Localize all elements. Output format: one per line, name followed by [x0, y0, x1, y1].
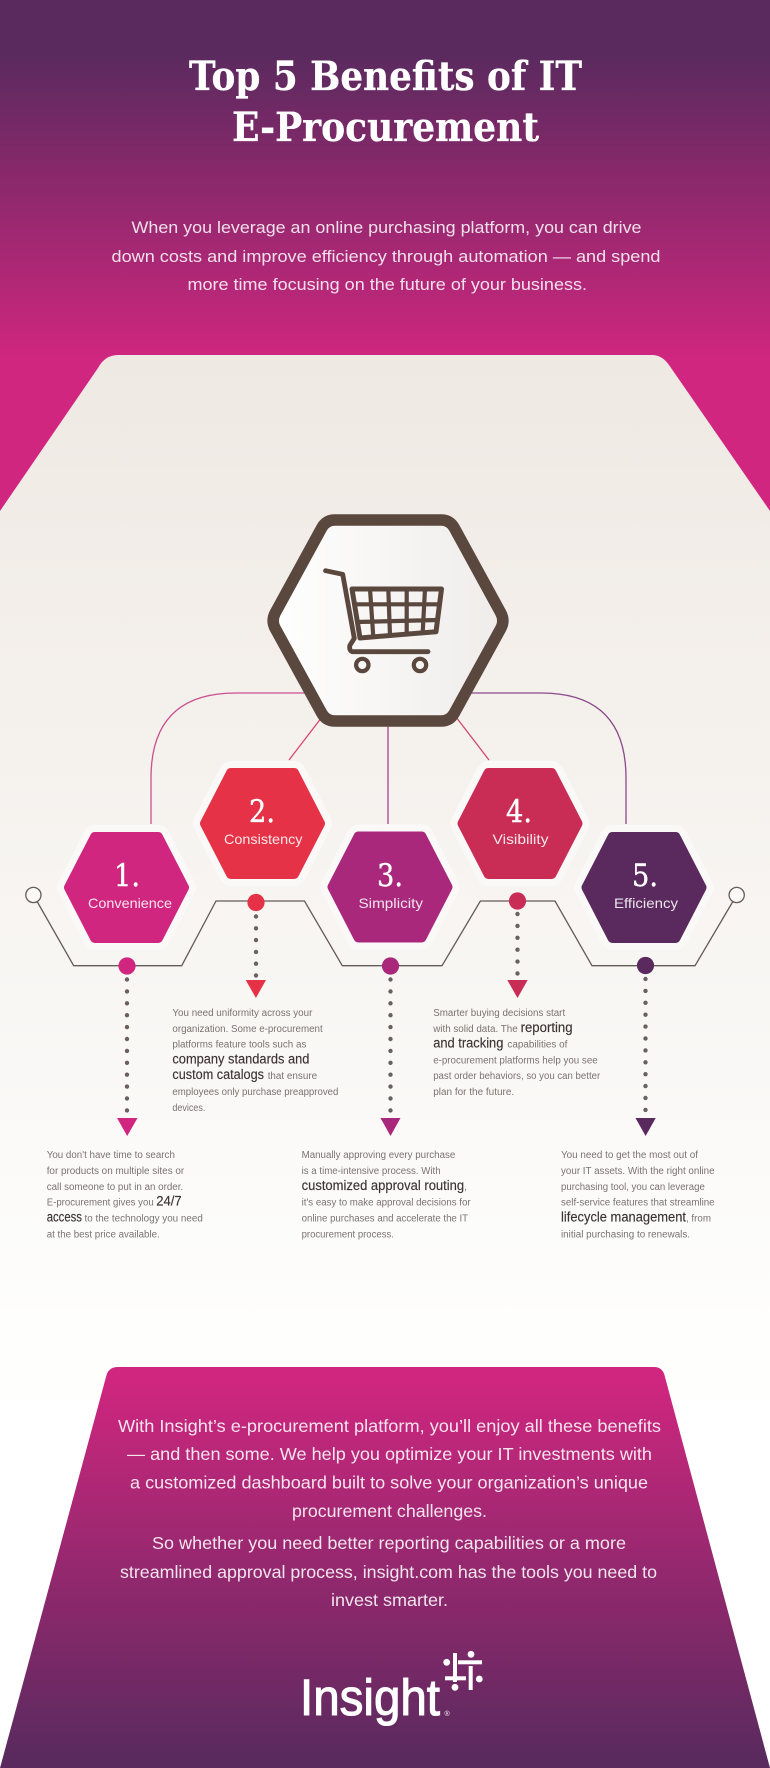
- connector to benefit 1: [151, 693, 309, 824]
- text block: visibility: capabilities of: [507, 1040, 568, 1051]
- arrow: benefit 2: [246, 894, 266, 998]
- text block: visibility: e-procurement platforms help you see: [433, 1056, 598, 1066]
- text block: consistency: custom catalogs: [172, 1067, 264, 1082]
- text block: simplicity: ,: [464, 1182, 467, 1193]
- text block: convenience: to the technology you need: [84, 1214, 203, 1225]
- text block: efficiency: [561, 1150, 715, 1240]
- text block: simplicity: procurement process.: [302, 1230, 394, 1240]
- text block: visibility: and tracking: [433, 1036, 503, 1051]
- benefit 1: hexagon: 1.: [114, 858, 140, 894]
- closing text: So whether you need better reporting capabilities or a more: [152, 1533, 626, 1553]
- text block: consistency: You need uniformity across your: [172, 1008, 313, 1019]
- benefit 4: hexagon: Visibility: [492, 831, 548, 847]
- text block: visibility: reporting: [521, 1020, 573, 1035]
- closing text: procurement challenges.: [292, 1501, 487, 1521]
- connector to benefit 3: [387, 726, 389, 824]
- closing text: a customized dashboard built to solve your organization’s unique: [130, 1472, 648, 1492]
- text block: efficiency: You need to get the most out of: [561, 1150, 698, 1161]
- text block: efficiency: self-service features that streamline: [561, 1198, 715, 1209]
- text block: visibility: Smarter buying decisions start: [433, 1008, 565, 1019]
- text block: consistency: [172, 1008, 338, 1114]
- text block: efficiency: initial purchasing to renewals.: [561, 1230, 690, 1240]
- text block: visibility: with solid data. The: [432, 1024, 518, 1035]
- text block: simplicity: it's easy to make approval decisions for: [302, 1198, 471, 1209]
- arrow: benefit 4: [507, 892, 528, 998]
- benefit 4: hexagon: [462, 773, 578, 874]
- benefit 3: hexagon: Simplicity: [358, 895, 423, 911]
- benefit 2: hexagon: Consistency: [224, 831, 302, 847]
- connector to benefit 5: [467, 693, 626, 824]
- benefit 1: hexagon: [69, 837, 184, 938]
- header background: [0, 0, 770, 520]
- intro text: down costs and improve efficiency through automation — and spend: [112, 248, 660, 266]
- text block: convenience: [47, 1150, 203, 1240]
- closing text: streamlined approval process, insight.com has the tools you need to: [120, 1562, 657, 1582]
- arrow: benefit 3: [380, 957, 400, 1136]
- text block: simplicity: [302, 1150, 471, 1240]
- timeline start node: [26, 887, 41, 903]
- arrow: benefit 5: [636, 957, 656, 1136]
- text block: simplicity: customized approval routing: [302, 1178, 464, 1193]
- panel: closing section: [0, 1367, 770, 1768]
- text block: convenience: access: [47, 1210, 82, 1225]
- logo: Insight: Insight: [300, 1669, 440, 1726]
- text block: simplicity: Manually approving every purchase: [302, 1150, 456, 1161]
- zigzag timeline: [33, 895, 737, 966]
- text block: convenience: for products on multiple sites or: [47, 1166, 185, 1177]
- connector to benefit 2: [289, 717, 322, 760]
- timeline end node: [729, 887, 744, 903]
- icon: Insight symbol: [443, 1651, 483, 1691]
- text block: efficiency: lifecycle management: [561, 1210, 686, 1225]
- intro text: [112, 219, 660, 294]
- benefit 5: hexagon: Efficiency: [614, 895, 678, 911]
- text block: consistency: employees only purchase preapproved: [172, 1087, 338, 1098]
- text block: convenience: call someone to put in an order.: [47, 1182, 183, 1193]
- benefit 3: hexagon: [332, 836, 448, 938]
- benefit 5: hexagon: [586, 837, 702, 938]
- text block: visibility: [432, 1008, 601, 1098]
- text block: convenience: 24/7: [156, 1194, 182, 1209]
- intro text: more time focusing on the future of your business.: [188, 276, 587, 294]
- closing text: [118, 1416, 661, 1610]
- text block: convenience: at the best price available.: [47, 1230, 160, 1240]
- panel: main benefits background: [0, 355, 770, 1400]
- title: Top 5 Benefits of IT: [189, 53, 582, 100]
- icon: shopping cart: [326, 571, 442, 671]
- benefit 2: hexagon: [205, 773, 320, 874]
- text block: consistency: platforms feature tools such as: [172, 1040, 306, 1051]
- central hexagon with cart: [273, 520, 503, 721]
- title: E-Procurement: [232, 104, 539, 151]
- benefit 1: hexagon: Convenience: [88, 895, 172, 911]
- title: [189, 53, 582, 151]
- text block: convenience: You don't have time to search: [47, 1150, 175, 1161]
- text block: efficiency: , from: [686, 1214, 711, 1225]
- text block: efficiency: your IT assets. With the right online: [561, 1166, 715, 1177]
- text block: consistency: devices.: [172, 1103, 205, 1114]
- logo: Insight: ®: [444, 1710, 450, 1718]
- benefit 4: hexagon: 4.: [506, 794, 532, 830]
- logo: Insight: [300, 1651, 483, 1726]
- text block: consistency: company standards and: [172, 1052, 309, 1066]
- arrow: benefit 1: [117, 957, 138, 1136]
- text block: simplicity: is a time-intensive process. With: [302, 1166, 441, 1177]
- text block: simplicity: online purchases and accelerate the IT: [302, 1214, 468, 1225]
- intro text: When you leverage an online purchasing platform, you can drive: [132, 219, 642, 237]
- benefit 2: hexagon: 2.: [249, 794, 275, 830]
- closing text: — and then some. We help you optimize your IT investments with: [127, 1444, 652, 1464]
- text block: visibility: plan for the future.: [433, 1087, 514, 1098]
- connector lines from cart to benefits: [151, 693, 626, 824]
- text block: efficiency: purchasing tool, you can leverage: [561, 1182, 705, 1193]
- benefit 3: hexagon: 3.: [377, 858, 403, 894]
- closing text: invest smarter.: [331, 1590, 448, 1610]
- closing text: With Insight’s e-procurement platform, you’ll enjoy all these benefits: [118, 1416, 661, 1436]
- connector to benefit 4: [456, 717, 489, 760]
- text block: consistency: that ensure: [268, 1071, 318, 1082]
- text block: convenience: E-procurement gives you: [47, 1198, 154, 1209]
- text block: visibility: past order behaviors, so you can better: [433, 1071, 601, 1082]
- text block: consistency: organization. Some e-procurement: [172, 1024, 323, 1035]
- benefit 5: hexagon: 5.: [632, 858, 658, 894]
